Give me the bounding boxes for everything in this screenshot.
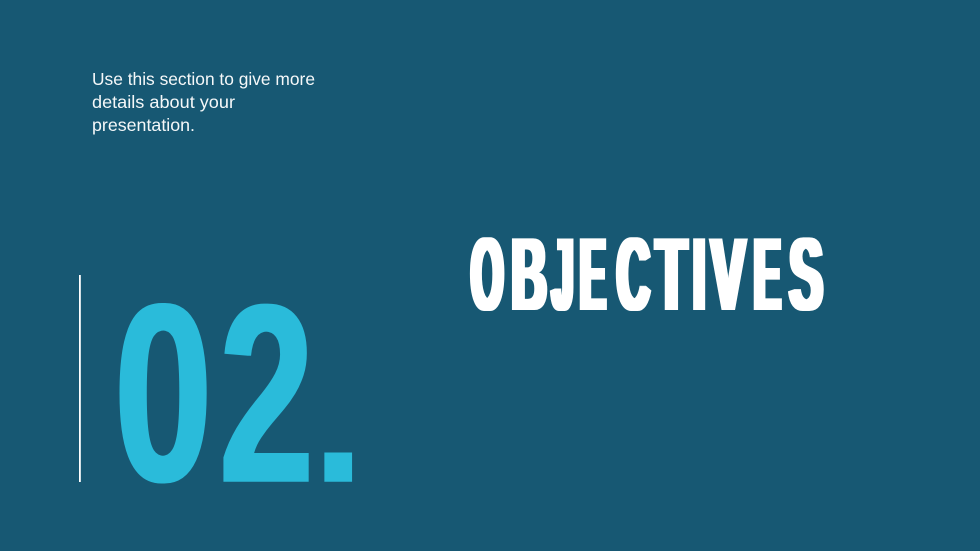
title: objectives: E bbox=[580, 216, 605, 333]
section number bbox=[114, 250, 363, 536]
title: objectives: I bbox=[693, 215, 705, 332]
description text block: details about your bbox=[92, 92, 235, 112]
description text block bbox=[92, 69, 315, 135]
description text block: presentation. bbox=[92, 115, 195, 135]
title: objectives: E bbox=[754, 216, 780, 332]
section number: . bbox=[314, 305, 363, 524]
title: objectives: B bbox=[512, 218, 546, 333]
section number: 0 bbox=[114, 250, 212, 536]
title: objectives bbox=[471, 215, 823, 333]
description text block: Use this section to give more bbox=[92, 69, 315, 89]
section number: 2 bbox=[219, 251, 314, 536]
title: objectives: T bbox=[656, 217, 687, 333]
title: objectives: C bbox=[617, 215, 650, 332]
title: objectives: J bbox=[552, 215, 573, 333]
title: objectives: V bbox=[711, 217, 746, 333]
title: objectives: O bbox=[471, 215, 503, 332]
vertical divider line bbox=[79, 275, 81, 482]
title: objectives: S bbox=[789, 217, 823, 333]
